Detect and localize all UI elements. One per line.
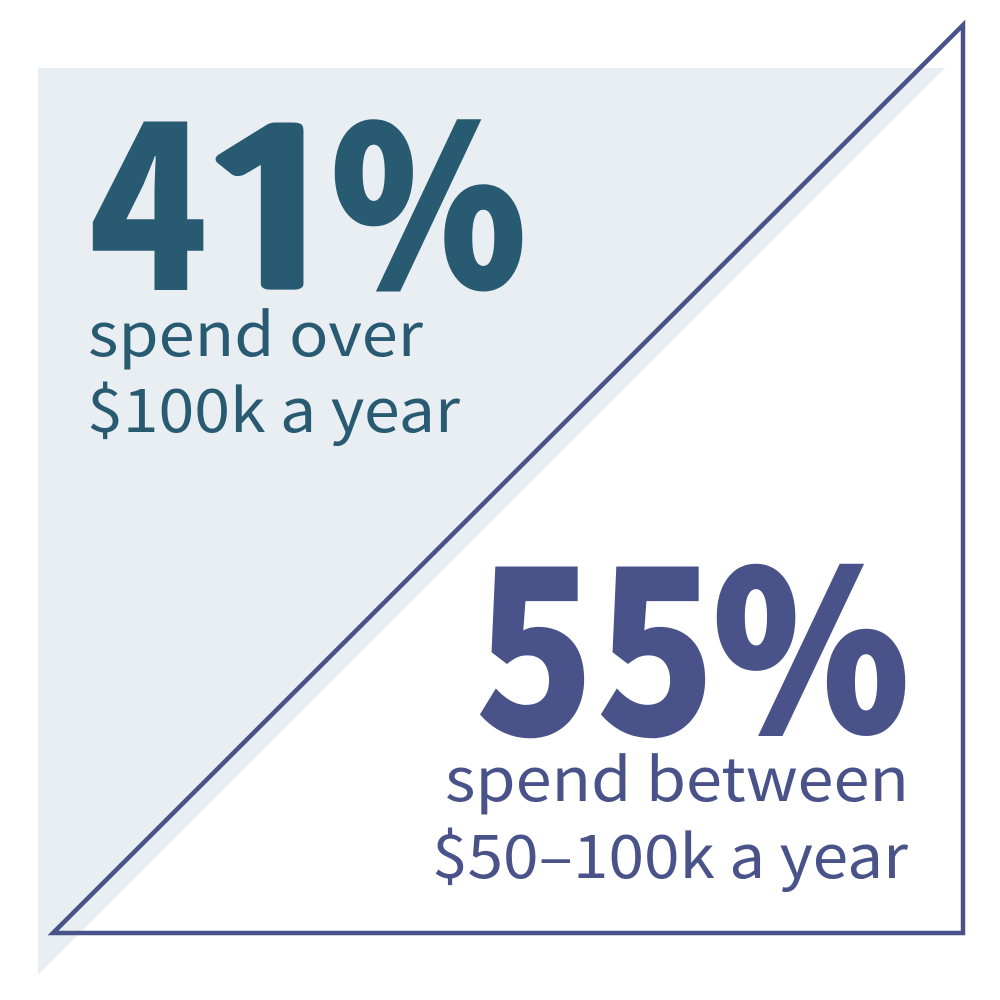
label: spend over $100k a year: [87, 287, 461, 450]
label: spend over $100k a year: spend over: [88, 287, 424, 374]
number: 55%: %: [713, 478, 909, 794]
stat: 55 percent: [432, 466, 909, 896]
number: 55%: 5: [475, 466, 595, 802]
number: 41%: 1: [180, 108, 371, 318]
number: 41%: 4: [88, 21, 208, 357]
label: spend between $50–100k a year: spend between: [445, 732, 909, 819]
label: spend between $50–100k a year: $50–100k a year: [432, 809, 909, 896]
stat: 41 percent: [87, 21, 526, 450]
number: 41%: [88, 21, 526, 357]
label: spend over $100k a year: $100k a year: [87, 363, 461, 450]
number: 55%: [475, 466, 909, 802]
number: 41%: %: [331, 34, 526, 350]
number: 55%: 5: [596, 466, 716, 802]
label: spend between $50–100k a year: [432, 732, 909, 896]
